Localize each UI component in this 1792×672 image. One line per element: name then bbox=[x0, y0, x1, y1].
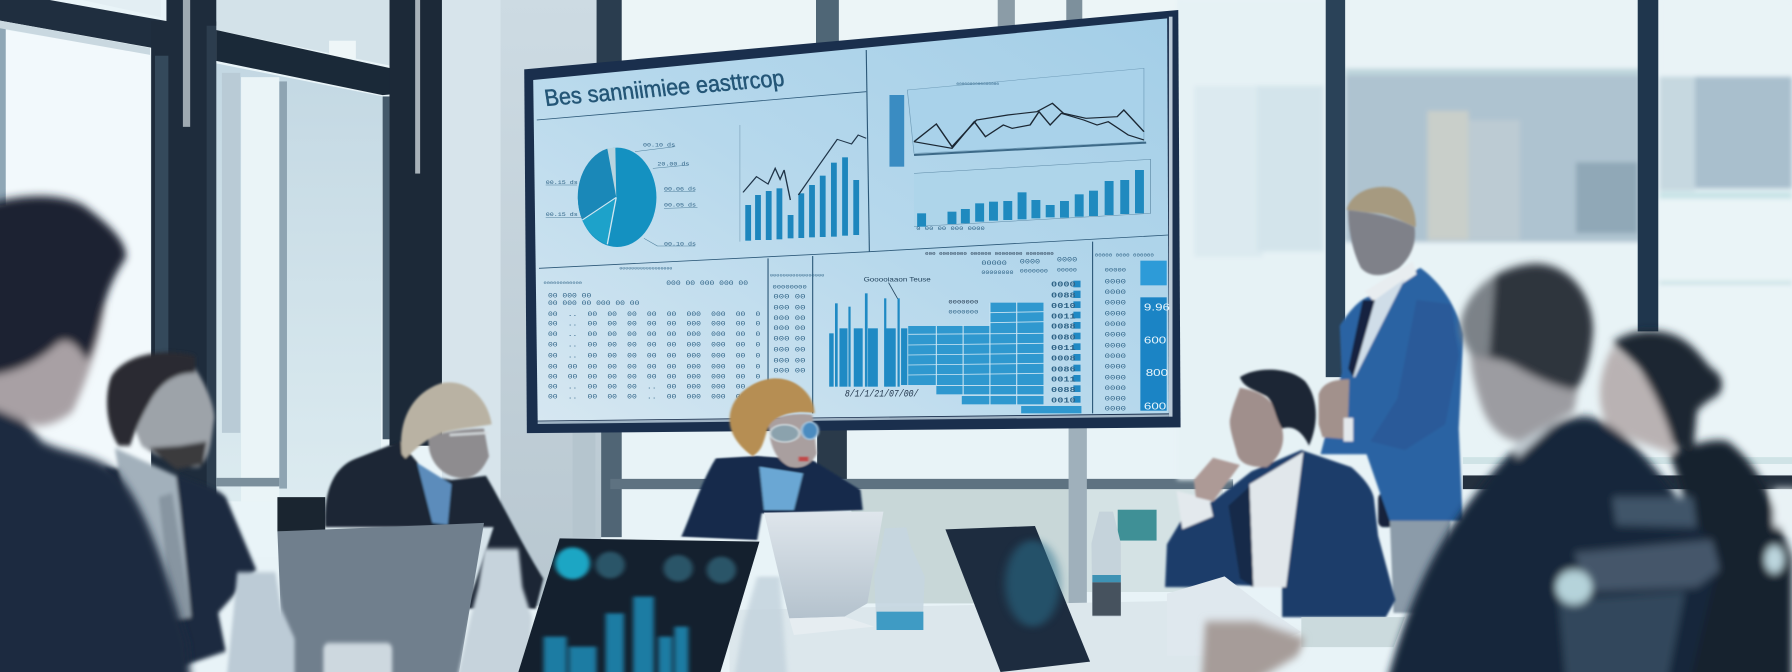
right-hand KPI column: 0000 bbox=[1105, 353, 1126, 361]
lower block chart: 0000000 bbox=[948, 299, 979, 305]
data table: 000 00 bbox=[773, 325, 806, 333]
chair back bbox=[1556, 540, 1784, 672]
left window frames bbox=[0, 0, 442, 557]
pie chart: 00.10 ds bbox=[643, 142, 676, 148]
lower block chart: 00000000 bbox=[981, 270, 1014, 276]
data table: 000 00 bbox=[773, 304, 806, 312]
data table: 00000000 bbox=[773, 284, 807, 290]
lower block chart bbox=[829, 252, 1081, 413]
data table: 00000000000000000 bbox=[770, 273, 825, 278]
data table: 00 .. 00 00 00 .. 00 000 000 00 0 bbox=[548, 394, 760, 401]
data table: 00 00 00 00 00 00 00 000 000 00 0 bbox=[548, 374, 760, 381]
hands on papers bbox=[1202, 621, 1305, 672]
right-hand KPI column: 0000 bbox=[1105, 364, 1126, 371]
upper-right line chart: 0000000000000000 bbox=[956, 83, 1000, 87]
lower block chart: 0010 bbox=[1051, 396, 1076, 405]
right window with building reflection bbox=[1177, 0, 1792, 489]
silver laptop bbox=[764, 512, 883, 618]
right-hand KPI column: 0000 bbox=[1105, 385, 1126, 393]
lower block chart: 0008 bbox=[1051, 354, 1076, 363]
shirt and tie bbox=[115, 448, 191, 621]
data table: 00 000 00 000 00 00 bbox=[548, 301, 639, 308]
data table: 000 00 000 000 00 bbox=[666, 281, 748, 288]
blurred mug bbox=[323, 643, 392, 672]
blue shirt bbox=[417, 463, 452, 525]
blurred foreground woman, left bbox=[0, 196, 191, 672]
right-hand KPI column bbox=[1095, 253, 1170, 413]
lower block chart: 00000 bbox=[981, 261, 1007, 268]
wall-mounted presentation screen bbox=[524, 10, 1181, 433]
lower block chart: 0086 bbox=[1051, 365, 1076, 374]
data table: 00 .. 00 00 00 00 00 000 000 00 0 bbox=[548, 332, 760, 339]
pie chart: 00.06 ds bbox=[664, 186, 697, 192]
glasses bbox=[450, 433, 488, 435]
centre table and items bbox=[681, 378, 1220, 672]
data table: 000000000000 bbox=[543, 281, 582, 286]
blurred bottle in front of laptops bbox=[734, 577, 787, 672]
grey laptop and bottles, left bbox=[226, 523, 532, 672]
lower block chart: 0011 bbox=[1051, 343, 1076, 353]
data table: 000 00 bbox=[773, 315, 806, 323]
lower block chart: 0080 bbox=[1051, 333, 1076, 342]
dark laptop centre-right bbox=[945, 526, 1090, 672]
suit bbox=[0, 403, 191, 672]
woman with bun bbox=[1600, 331, 1792, 672]
face bbox=[428, 429, 489, 478]
lower block chart: 0010 bbox=[1051, 301, 1076, 311]
data table: 00 .. 00 00 00 .. 00 000 000 00 0 bbox=[548, 384, 760, 391]
right-hand KPI column: 600 bbox=[1144, 400, 1167, 412]
lower block chart: Gooooiaaon Teuse bbox=[864, 277, 931, 283]
bar and line chart bbox=[740, 125, 866, 242]
right-hand KPI column: 0000 bbox=[1105, 396, 1126, 403]
data table bbox=[543, 267, 825, 401]
screen title: Bes sanniimiee easttrcop bbox=[543, 65, 786, 111]
data table: 000 00 bbox=[773, 358, 806, 365]
lower block chart: 000 00000000 000000 00000000 00000000 bbox=[925, 252, 1054, 257]
right-hand KPI column: 0000 bbox=[1105, 289, 1126, 297]
right-hand KPI column: 0000 bbox=[1105, 278, 1126, 286]
data table: 00 .. 00 00 00 00 00 000 000 00 0 bbox=[548, 353, 760, 360]
lower block chart: 8/1/1/21/07/00/ bbox=[845, 388, 919, 400]
screen bezel bbox=[524, 10, 1181, 433]
suit bbox=[325, 441, 543, 609]
lower block chart: 0000 bbox=[1020, 259, 1041, 266]
water bottle bbox=[874, 527, 925, 630]
blurred foreground people, right bbox=[1202, 264, 1792, 672]
screen bottom band bbox=[538, 414, 1169, 424]
table top bbox=[730, 600, 1220, 672]
right-hand KPI column: 0000 bbox=[1105, 374, 1126, 382]
data table: 000 00 bbox=[773, 347, 806, 354]
data table: 000 00 bbox=[773, 293, 806, 301]
dark laptop with dashboard, foreground bbox=[518, 538, 787, 672]
window panes behind the screen bbox=[597, 0, 1233, 603]
data table: 00 .. 00 00 00 00 00 000 000 00 0 bbox=[548, 321, 760, 328]
hanging window rods bbox=[183, 0, 420, 174]
pie chart: 00.15 ds bbox=[546, 180, 578, 186]
laptop lid bbox=[518, 538, 759, 672]
screen surface bbox=[533, 18, 1169, 421]
blurred water bottle, left bbox=[226, 572, 295, 672]
grey laptop lid bbox=[277, 523, 484, 672]
seated man body bbox=[1165, 370, 1395, 617]
suit bbox=[103, 467, 256, 672]
far water bottle bbox=[1091, 512, 1121, 617]
lower block chart: 0000000 bbox=[948, 309, 979, 315]
blurred water bottle, middle bbox=[455, 549, 532, 672]
lower-right bar chart bbox=[914, 159, 1151, 232]
table and papers bbox=[1301, 617, 1405, 647]
right-hand KPI column: 600 bbox=[1144, 334, 1167, 346]
lower block chart: 0088 bbox=[1051, 322, 1076, 331]
standing presenter bbox=[1319, 187, 1463, 613]
data table: 00 00 00 00 00 00 00 000 000 00 0 bbox=[548, 364, 760, 371]
lower block chart: 0011 bbox=[1051, 312, 1076, 321]
right-hand KPI column: 800 bbox=[1146, 367, 1169, 379]
blond seated man bbox=[325, 382, 543, 609]
hair bbox=[107, 352, 195, 446]
right-hand KPI column: 0000 bbox=[1105, 321, 1126, 329]
data table: 00 000 00 bbox=[548, 293, 591, 300]
seated man in navy suit bbox=[1165, 187, 1463, 656]
data table: 000000000000000000 bbox=[619, 267, 673, 271]
hair bbox=[0, 196, 126, 377]
panel dividers bbox=[537, 50, 1168, 413]
data table: 000 00 bbox=[773, 368, 806, 375]
right-hand KPI column: 0000 bbox=[1105, 332, 1126, 339]
right-hand KPI column: 0000 bbox=[1105, 300, 1126, 307]
right-hand KPI column: 00000 0000 000000 bbox=[1095, 253, 1154, 258]
lower-right bar chart: 0 00 00 000 0000 bbox=[916, 226, 985, 232]
blurred bar graph on laptop bbox=[544, 597, 688, 672]
right-hand KPI column: 00000 bbox=[1105, 267, 1126, 273]
data table: 000 00 bbox=[773, 336, 806, 343]
upper-right line chart bbox=[889, 68, 1146, 167]
pie chart: 20.00 ds bbox=[657, 161, 690, 167]
pie chart bbox=[546, 142, 698, 247]
blurred dashboard dots bbox=[555, 547, 736, 583]
lower block chart: 0088 bbox=[1051, 291, 1076, 300]
lower block chart: 0000 bbox=[1051, 280, 1076, 289]
data table: 00 .. 00 00 00 00 00 000 000 00 0 bbox=[548, 342, 760, 349]
hair bbox=[401, 382, 492, 459]
pie chart: 00.10 ds bbox=[664, 241, 697, 247]
face bbox=[0, 300, 105, 426]
lower block chart: 0011 bbox=[1051, 375, 1076, 384]
right-hand KPI column: 0000 bbox=[1105, 406, 1126, 413]
display stands bbox=[573, 423, 1087, 606]
lower block chart: 0000 bbox=[1057, 257, 1078, 264]
face bbox=[126, 369, 214, 467]
blurred bearded man bbox=[103, 352, 256, 672]
pie chart: 00.05 ds bbox=[664, 202, 697, 208]
lower block chart: 00000 bbox=[1057, 267, 1077, 273]
right-hand KPI column: 0000 bbox=[1105, 310, 1126, 318]
lower block chart: 0000000 bbox=[1020, 268, 1048, 274]
right-hand KPI column: 9.96 bbox=[1144, 301, 1170, 313]
grey-haired man bbox=[1386, 264, 1720, 672]
lower block chart: 0088 bbox=[1051, 385, 1076, 395]
right-hand KPI column: 0000 bbox=[1105, 342, 1126, 350]
blonde woman bbox=[681, 378, 863, 540]
pie chart: 00.15 ds bbox=[546, 212, 578, 218]
data table: 00 .. 00 00 00 00 00 000 000 00 0 bbox=[548, 312, 760, 319]
